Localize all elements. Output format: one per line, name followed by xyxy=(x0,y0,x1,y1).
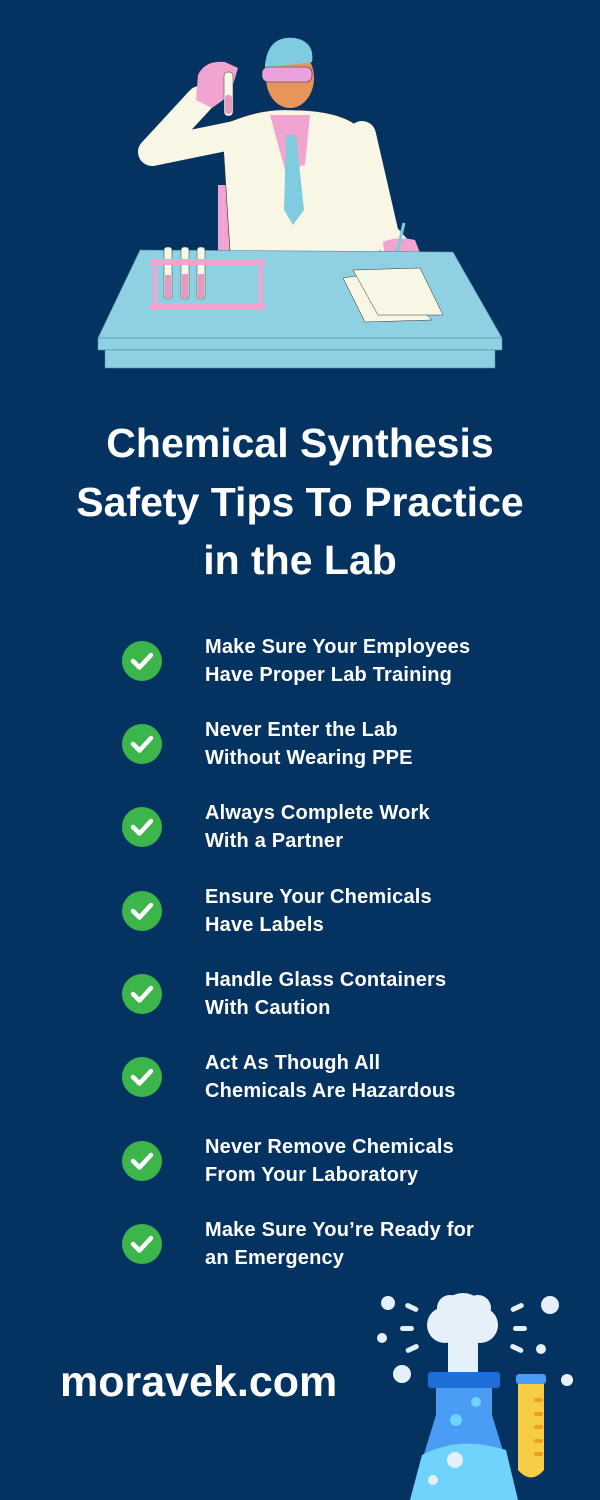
item 5: Handle Glass Containers xyxy=(205,969,446,991)
chair back xyxy=(218,185,238,255)
item 6: Act As Though All xyxy=(205,1052,380,1074)
item 5: With Caution xyxy=(205,997,331,1019)
item 2: Never Enter the Lab xyxy=(205,719,398,741)
checklist xyxy=(122,636,474,1269)
item 8: Make Sure You’re Ready for xyxy=(205,1219,474,1241)
item 1: Have Proper Lab Training xyxy=(205,664,452,686)
body coat xyxy=(222,110,380,252)
title: Safety Tips To Practice xyxy=(76,478,524,524)
head xyxy=(266,48,314,108)
item 3: Always Complete Work xyxy=(205,802,430,824)
item 2: Without Wearing PPE xyxy=(205,747,413,769)
item 4 xyxy=(122,886,432,936)
item 4: Ensure Your Chemicals xyxy=(205,886,432,908)
item 8: an Emergency xyxy=(205,1247,344,1269)
title xyxy=(76,420,524,583)
item 8 xyxy=(122,1219,474,1269)
right hand + pen xyxy=(383,238,422,268)
item 5 xyxy=(122,969,446,1019)
glove + tube xyxy=(196,62,238,108)
illustration: scientist at desk xyxy=(98,38,502,368)
item 7 xyxy=(122,1136,454,1186)
item 1 xyxy=(122,636,470,686)
raised arm xyxy=(152,100,235,152)
website url: moravek.com xyxy=(60,1358,337,1406)
item 7: From Your Laboratory xyxy=(205,1164,418,1186)
item 1: Make Sure Your Employees xyxy=(205,636,470,658)
shirt + tie xyxy=(270,115,310,170)
right arm xyxy=(362,135,400,252)
icon: flask and test tube xyxy=(377,1293,573,1500)
papers xyxy=(343,272,432,322)
test tube rack xyxy=(150,247,265,310)
item 6: Chemicals Are Hazardous xyxy=(205,1080,456,1102)
item 6 xyxy=(122,1052,456,1102)
item 7: Never Remove Chemicals xyxy=(205,1136,454,1158)
desk xyxy=(98,250,502,338)
item 3 xyxy=(122,802,430,852)
title: in the Lab xyxy=(203,537,397,583)
item 4: Have Labels xyxy=(205,914,324,936)
item 3: With a Partner xyxy=(205,830,343,852)
title: Chemical Synthesis xyxy=(106,420,494,466)
item 2 xyxy=(122,719,413,769)
